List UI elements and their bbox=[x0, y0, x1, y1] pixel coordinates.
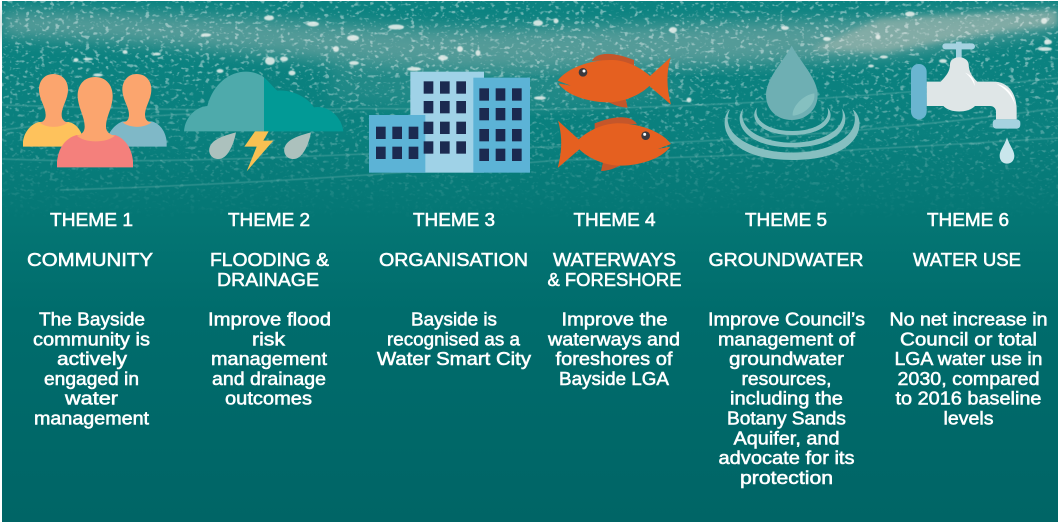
text: theme 2 description: management bbox=[211, 348, 327, 369]
heading: community: COMMUNITY bbox=[27, 249, 153, 270]
icon: lower fish bbox=[558, 117, 671, 171]
heading: flooding and drainage bbox=[210, 249, 330, 290]
heading: theme 6: THEME 6 bbox=[927, 209, 1009, 230]
heading: organisation: ORGANISATION bbox=[379, 249, 528, 270]
text: theme 4 description: waterways and bbox=[547, 328, 680, 349]
icon: person left bbox=[23, 74, 82, 147]
text: theme 6 description bbox=[890, 308, 1048, 428]
heading: theme 2: THEME 2 bbox=[228, 209, 310, 230]
text: theme 6 description: Council or total bbox=[900, 328, 1037, 349]
text: theme 1 description: community is bbox=[33, 328, 150, 349]
text: theme 5 description: including the bbox=[730, 388, 843, 409]
text: theme 3 description: Bayside is bbox=[411, 308, 497, 330]
column: theme 6 water use bbox=[890, 209, 1048, 428]
column: theme 2 flooding and drainage bbox=[208, 209, 331, 409]
heading: groundwater: GROUNDWATER bbox=[708, 249, 864, 270]
heading: waterways and foreshore: & FORESHORE bbox=[548, 269, 682, 290]
column: theme 1 community bbox=[27, 209, 153, 428]
text: theme 4 description: Bayside LGA bbox=[559, 368, 670, 389]
text: theme 5 description: Aquifer, and bbox=[734, 427, 840, 448]
column: theme 3 organisation bbox=[377, 209, 532, 369]
icon: person centre bbox=[57, 77, 133, 167]
text: theme 1 description bbox=[33, 308, 150, 428]
text: theme 5 description: Improve Council’s bbox=[708, 308, 865, 330]
icon: storm cloud bbox=[184, 72, 343, 171]
icon: two fish bbox=[558, 54, 671, 171]
heading: theme 3: THEME 3 bbox=[413, 209, 495, 230]
text: theme 6 description: No net increase in bbox=[890, 308, 1048, 330]
text: theme 2 description: Improve flood bbox=[208, 308, 331, 330]
text: theme 2 description bbox=[208, 308, 331, 409]
icon: upper fish bbox=[558, 54, 671, 108]
text: theme 4 description: foreshores of bbox=[556, 348, 673, 369]
text: theme 6 description: 2030, compared bbox=[898, 368, 1040, 389]
column: theme 4 waterways and foreshore bbox=[547, 209, 682, 389]
text: theme 1 description: water bbox=[64, 388, 118, 409]
text: theme 5 description bbox=[708, 308, 865, 488]
heading: waterways and foreshore bbox=[548, 249, 682, 290]
icon: water drop with ripples bbox=[725, 46, 860, 160]
icon: community people bbox=[23, 74, 167, 167]
text: theme 2 description: and drainage bbox=[212, 368, 326, 389]
text: theme 6 description: LGA water use in bbox=[894, 348, 1042, 369]
heading: theme 5: THEME 5 bbox=[745, 209, 827, 230]
text: theme 1 description: engaged in bbox=[44, 368, 139, 389]
text: theme 4 description: Improve the bbox=[562, 308, 668, 330]
text: theme 3 description bbox=[377, 308, 532, 369]
heading: waterways and foreshore: WATERWAYS bbox=[553, 249, 676, 270]
text: theme 6 description: to 2016 baseline bbox=[896, 388, 1042, 409]
text: theme 2 description: risk bbox=[252, 328, 286, 349]
text: theme 3 description: Water Smart City bbox=[377, 348, 532, 369]
text: theme 5 description: groundwater bbox=[729, 348, 844, 369]
text: theme 5 description: management of bbox=[718, 328, 856, 349]
text: theme 5 description: Botany Sands bbox=[727, 408, 846, 428]
text: theme 5 description: resources, bbox=[742, 368, 832, 389]
heading: water use: WATER USE bbox=[913, 249, 1021, 270]
heading: flooding and drainage: FLOODING & bbox=[210, 249, 330, 270]
heading: theme 4: THEME 4 bbox=[574, 209, 656, 230]
text: theme 6 description: levels bbox=[944, 408, 994, 428]
text: theme 5 description: protection bbox=[740, 467, 833, 488]
text: theme 4 description bbox=[547, 308, 680, 389]
text: theme 5 description: advocate for its bbox=[718, 447, 854, 468]
text: theme 1 description: The Bayside bbox=[39, 308, 145, 330]
icon: person right bbox=[108, 74, 167, 147]
text: theme 2 description: outcomes bbox=[225, 388, 312, 409]
heading: theme 1: THEME 1 bbox=[50, 209, 133, 230]
text: theme 3 description: recognised as a bbox=[387, 328, 521, 349]
heading: flooding and drainage: DRAINAGE bbox=[217, 269, 319, 290]
column: theme 5 groundwater bbox=[708, 209, 865, 488]
icon: dripping tap bbox=[911, 42, 1020, 164]
text: theme 1 description: management bbox=[34, 408, 149, 428]
text: theme 1 description: actively bbox=[57, 348, 128, 369]
icon: city buildings bbox=[369, 72, 530, 173]
